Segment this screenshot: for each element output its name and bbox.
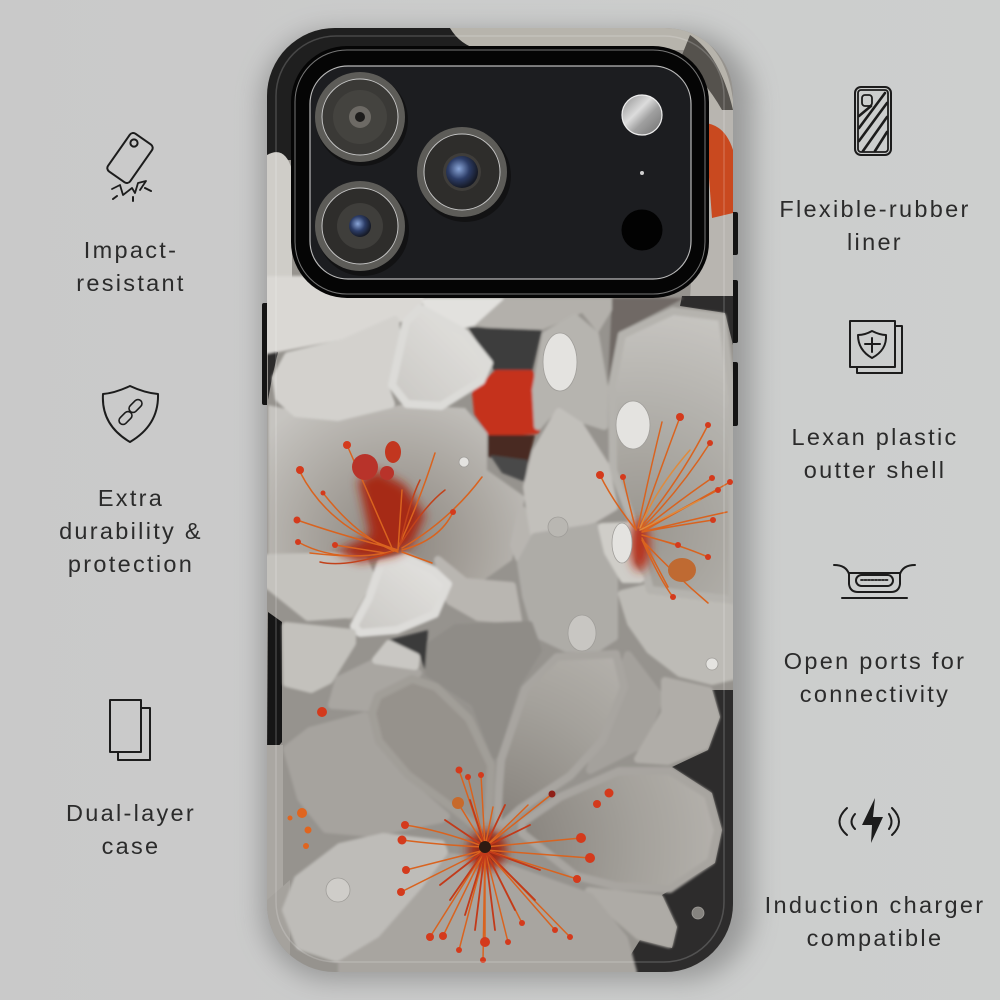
cream section behind island right <box>690 125 733 296</box>
bottom flower <box>286 654 718 972</box>
lens: right <box>417 127 511 222</box>
sensor <box>622 210 662 250</box>
lens: top left <box>315 72 408 166</box>
water droplets <box>326 333 718 919</box>
white petals over left flower <box>276 308 489 417</box>
feature: flexible liner <box>779 87 971 255</box>
label: Open ports for <box>784 648 966 674</box>
label: Induction charger <box>765 892 985 918</box>
feature: induction charging <box>765 798 985 951</box>
microphone <box>640 171 644 175</box>
lower background petals <box>286 625 716 770</box>
label: Flexible-rubber <box>779 196 971 222</box>
feature: impact-resistant <box>76 131 186 296</box>
label: outter shell <box>804 457 946 483</box>
label: durability & <box>59 518 203 544</box>
orange blossom behind island <box>709 124 733 218</box>
label: connectivity <box>800 681 950 707</box>
lens: bottom left <box>315 181 409 276</box>
icon: bolt with waves <box>840 798 899 843</box>
icon: dropped phone <box>106 131 154 201</box>
top white flower <box>268 280 684 385</box>
phone case <box>262 28 738 972</box>
label: case <box>102 833 160 859</box>
stamens: left flower <box>297 445 482 564</box>
side buttons <box>262 212 738 426</box>
label: protection <box>68 551 194 577</box>
icon: two cards <box>110 700 150 760</box>
label: Impact- <box>84 237 178 263</box>
icon: hatched phone case <box>855 87 891 155</box>
icon: shield card <box>850 321 902 373</box>
feature: durability <box>59 386 203 577</box>
flower art with soft edges <box>268 280 733 972</box>
camera island <box>291 46 709 298</box>
label: resistant <box>76 270 186 296</box>
label: compatible <box>807 925 943 951</box>
label: Dual-layer <box>66 800 196 826</box>
icon: shield with link <box>103 386 158 442</box>
label: Extra <box>98 485 164 511</box>
right flower <box>514 311 733 681</box>
feature: open ports <box>784 565 966 707</box>
bottom flower tips <box>288 707 614 963</box>
right flower tips <box>596 413 733 600</box>
stamens: bottom flower <box>401 770 590 960</box>
red centers <box>335 470 650 870</box>
left flower <box>268 405 525 633</box>
feature: lexan shell <box>791 321 959 483</box>
icon: usb-c port <box>834 565 915 598</box>
flash <box>622 95 662 135</box>
label: Lexan plastic <box>791 424 959 450</box>
feature: dual-layer <box>66 700 196 859</box>
dark background patches <box>267 296 733 972</box>
orange ball <box>476 374 536 433</box>
phone shadow <box>262 32 752 980</box>
label: liner <box>847 229 903 255</box>
stamens: right flower <box>600 417 730 603</box>
floral artwork <box>267 28 733 972</box>
top edge colouring <box>267 28 490 160</box>
glossy edge highlight <box>276 36 724 962</box>
left flower tips <box>294 441 456 548</box>
